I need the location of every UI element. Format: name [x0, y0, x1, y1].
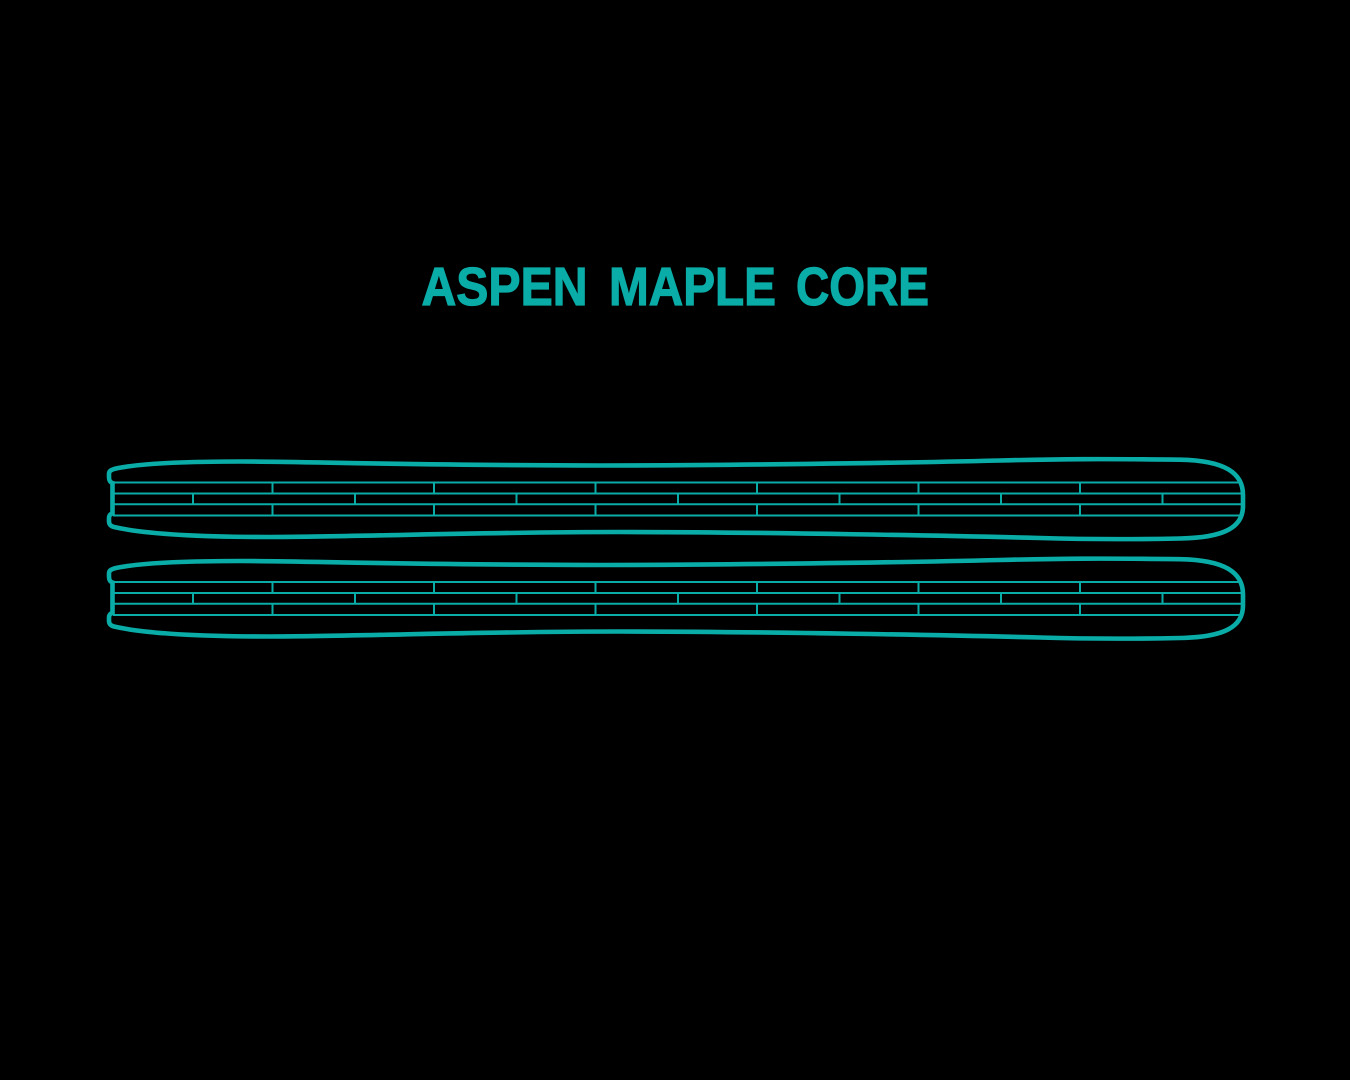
wood strips: [113, 482, 1241, 516]
title: [422, 257, 929, 317]
title: MAPLE: [609, 257, 776, 317]
ski outline: [109, 559, 1243, 639]
wood strips: [113, 582, 1241, 615]
title: CORE: [796, 257, 929, 317]
ski core diagram: top ski: [109, 459, 1243, 539]
ski core diagram: bottom ski: [109, 559, 1243, 639]
ski outline: [109, 459, 1243, 539]
title: ASPEN: [422, 257, 588, 317]
